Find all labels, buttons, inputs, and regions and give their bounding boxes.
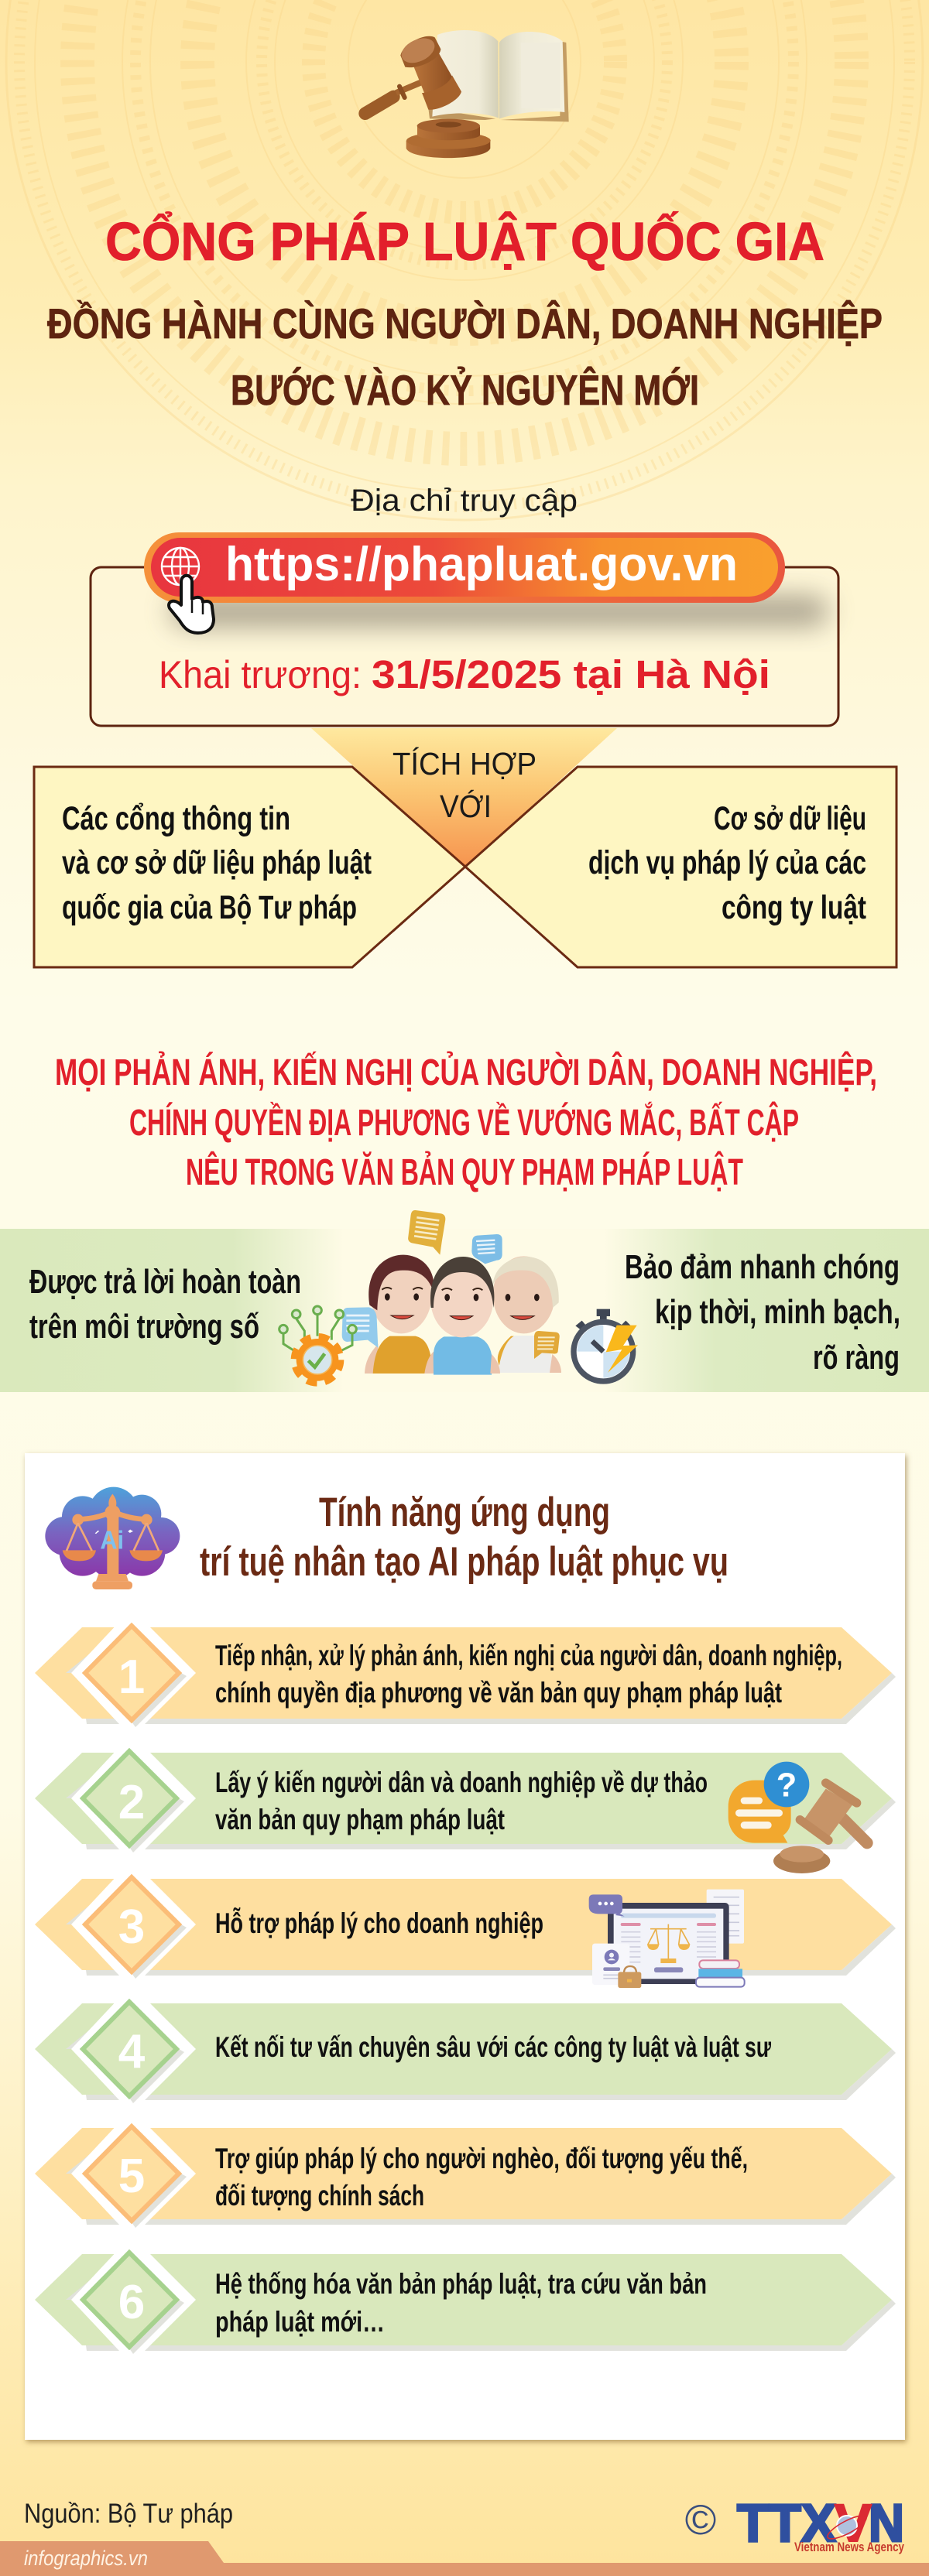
feature 3	[35, 1860, 896, 1989]
icon: AI scales	[45, 1487, 180, 1589]
right box text	[588, 800, 866, 926]
icon: question bubble and gavel	[728, 1762, 867, 1873]
title: CỔNG PHÁP LUẬT QUỐC GIA	[105, 210, 824, 272]
url text: https://phapluat.gov.vn	[225, 538, 738, 591]
card heading	[200, 1490, 728, 1585]
panel: left integration box	[34, 767, 465, 967]
right box text: Cơ sở dữ liệu	[714, 800, 866, 837]
icon: gavel and book	[365, 30, 569, 158]
TTXVN logo: V	[835, 2493, 872, 2553]
icon: stopwatch	[574, 1309, 638, 1381]
feature 2 text: văn bản quy phạm pháp luật	[215, 1804, 505, 1835]
feature 3 text: Hỗ trợ pháp lý cho doanh nghiệp	[215, 1907, 543, 1939]
right box text: công ty luật	[722, 889, 866, 926]
speech bubble yellow small	[534, 1331, 560, 1359]
feature 6 text: Hệ thống hóa văn bản pháp luật, tra cứu văn bản	[215, 2268, 707, 2300]
right band text: rõ ràng	[813, 1339, 900, 1377]
integration triangle: VỚI	[440, 789, 492, 824]
panel: launch box	[91, 567, 838, 726]
feature 2 text: Lấy ý kiến người dân và doanh nghiệp về dự thảo	[215, 1767, 708, 1798]
icon: legal tablet	[589, 1890, 745, 1988]
number 1: 1	[118, 1651, 145, 1704]
background drum pattern	[6, 0, 923, 520]
feature 6	[35, 2236, 896, 2364]
subtitle	[47, 299, 883, 414]
card heading: trí tuệ nhân tạo AI pháp luật phục vụ	[200, 1539, 728, 1585]
feature 5 text	[215, 2143, 748, 2212]
copyright mark: ©	[685, 2496, 716, 2544]
number 3: 3	[118, 1900, 145, 1954]
number 5: 5	[118, 2150, 145, 2203]
feature 5	[35, 2109, 896, 2238]
subtitle: BƯỚC VÀO KỶ NGUYÊN MỚI	[231, 366, 699, 414]
icon: question bubble and gavel: ?	[776, 1767, 797, 1805]
speech bubble yellow large	[408, 1210, 445, 1255]
red heading	[55, 1051, 877, 1193]
left box text: quốc gia của Bộ Tư pháp	[62, 889, 357, 926]
card heading: Tính năng ứng dụng	[319, 1490, 610, 1535]
right band text	[625, 1248, 900, 1377]
icon: AI scales: Ai	[100, 1527, 124, 1555]
launch date: Khai trương:	[159, 653, 362, 696]
feature 5 text: đối tượng chính sách	[215, 2180, 424, 2212]
green band	[0, 1229, 929, 1392]
source: Nguồn: Bộ Tư pháp	[24, 2499, 233, 2529]
access address label: Địa chỉ truy cập	[351, 484, 578, 518]
speech bubble blue left	[342, 1307, 378, 1348]
feature 4	[35, 1985, 896, 2113]
left box text: và cơ sở dữ liệu pháp luật	[62, 844, 372, 881]
icon: globe and hand cursor	[162, 548, 214, 633]
number 4: 4	[118, 2025, 146, 2078]
TTXVN logo: N	[869, 2493, 904, 2553]
feature 1	[35, 1609, 896, 1737]
url pill	[144, 532, 828, 627]
website label: infographics.vn	[24, 2547, 148, 2570]
number 6: 6	[118, 2276, 145, 2329]
left band text	[29, 1263, 301, 1346]
TTXVN logo: TTX	[737, 2493, 836, 2553]
feature 6 text: pháp luật mới…	[215, 2306, 385, 2338]
panel: right integration box	[465, 767, 896, 967]
icon: gear with circuit	[279, 1306, 356, 1381]
integration triangle	[311, 728, 617, 867]
feature 2	[35, 1734, 896, 1863]
feature 2 text	[215, 1767, 708, 1835]
panel: AI features card	[25, 1453, 905, 2440]
left band text: trên môi trường số	[29, 1308, 259, 1346]
launch date bold: 31/5/2025 tại Hà Nội	[372, 652, 770, 696]
feature 6 text	[215, 2268, 707, 2338]
feature 1 text	[215, 1640, 842, 1709]
left box text: Các cổng thông tin	[62, 800, 290, 837]
left band text: Được trả lời hoàn toàn	[29, 1263, 301, 1301]
number 2: 2	[118, 1776, 145, 1829]
TTXVN logo	[737, 2493, 904, 2554]
icon: three people with speech bubbles	[279, 1210, 638, 1381]
integration label: TÍCH HỢP	[393, 746, 536, 782]
footer bar	[0, 2541, 929, 2576]
speech bubble blue	[471, 1234, 502, 1264]
left box text	[62, 800, 372, 926]
